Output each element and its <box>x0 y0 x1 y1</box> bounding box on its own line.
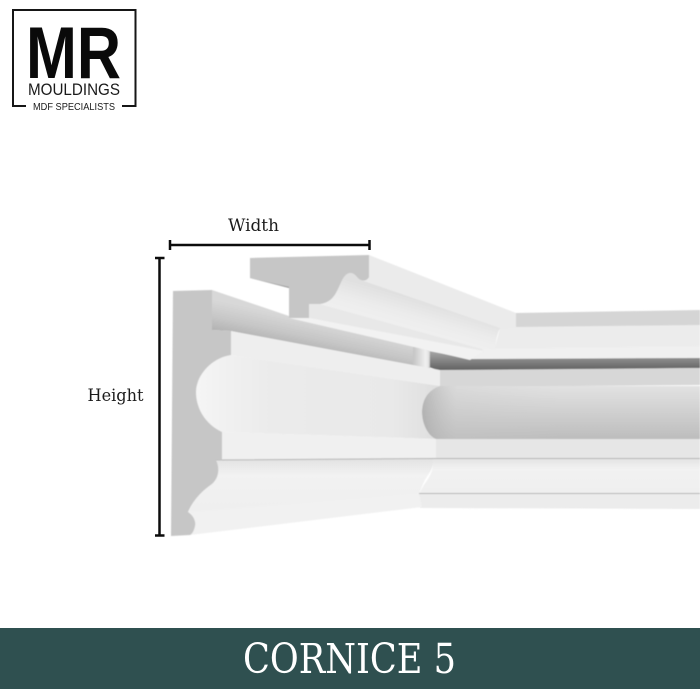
left cut end profile <box>171 290 231 536</box>
logo tagline: MDF SPECIALISTS <box>33 102 115 113</box>
right run: lower band <box>440 368 700 387</box>
right run: round bead <box>422 386 700 439</box>
width label: Width <box>228 216 279 236</box>
dimension: height <box>88 258 164 536</box>
right run: bottom fillet <box>419 494 700 509</box>
title text: CORNICE 5 <box>243 635 456 683</box>
logo <box>13 10 136 113</box>
upper moulding: cove <box>320 273 500 350</box>
dimension: width <box>170 216 370 250</box>
right run: flat band <box>436 439 700 459</box>
cornice moulding illustration <box>171 255 700 536</box>
left run: round bead <box>196 355 440 439</box>
upper moulding: fillet <box>309 304 484 352</box>
left run: flat band <box>222 432 436 460</box>
logo word MOULDINGS: MOULDINGS <box>28 80 120 99</box>
title banner <box>0 628 700 689</box>
upper moulding: top face <box>361 255 516 330</box>
left run: recessed wall <box>212 290 430 372</box>
left run: upper band <box>231 331 440 386</box>
left run: bottom fillet <box>188 493 422 535</box>
width arrow <box>170 240 370 250</box>
upper moulding: under shadow <box>250 278 289 288</box>
upper moulding: lower edge <box>289 318 484 360</box>
right run: shadow gap <box>429 351 700 371</box>
logo frame <box>13 10 136 106</box>
height arrow <box>155 258 164 536</box>
banner background <box>0 628 700 689</box>
logo letters MR: MR <box>26 13 121 94</box>
upper moulding cut end profile <box>250 255 369 318</box>
left run: ogee <box>188 459 433 513</box>
right run: lower ogee <box>419 458 700 495</box>
shadow lines <box>216 458 700 494</box>
right run: upper moulding <box>470 310 700 360</box>
height label: Height <box>88 386 144 406</box>
left run: pale inner wall <box>413 346 429 370</box>
